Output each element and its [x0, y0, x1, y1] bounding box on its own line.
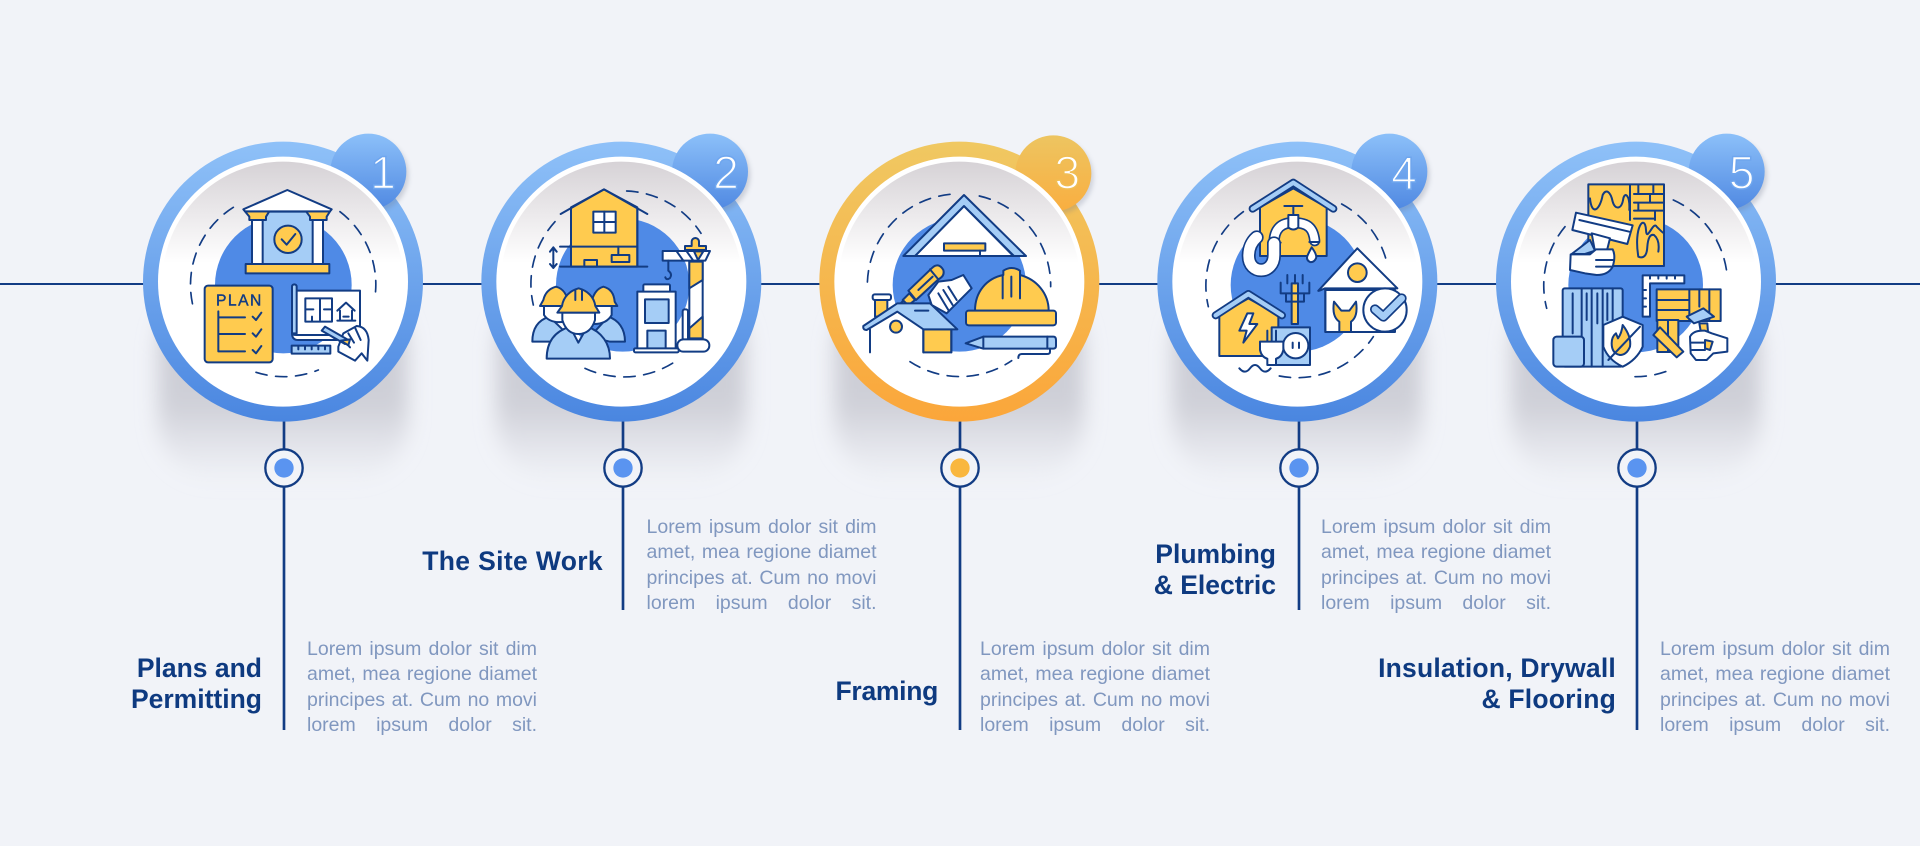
icon: ruler square: [1643, 275, 1684, 317]
heading: the site work: The Site Work: [422, 546, 603, 576]
circle and icon group 2: [481, 134, 762, 610]
icon: insulation panels: [1553, 288, 1643, 367]
text block 5: principes at. Cum no movi: [1660, 689, 1890, 711]
icon: small house: [863, 294, 957, 352]
panel: step 4 plumbing and electric: [1154, 134, 1551, 614]
icon: roof frame: [903, 195, 1026, 256]
icon: flooring planks and hammer: [1653, 289, 1727, 360]
circle and icon group 4: [1157, 134, 1438, 610]
text block 1: principes at. Cum no movi: [307, 689, 537, 711]
text block 5: amet, mea regione diamet: [1660, 663, 1890, 685]
text block 1: [307, 638, 537, 736]
icon: blueprint and hand: [292, 284, 369, 361]
icon: plumbing house: [1249, 183, 1333, 270]
icon: pencil: [966, 337, 1056, 358]
text block 4: principes at. Cum no movi: [1321, 567, 1551, 589]
text block 3: principes at. Cum no movi: [980, 689, 1210, 711]
icon: plan checklist: PLAN: [216, 292, 261, 309]
text block 3: lorem ipsum dolor sit.: [980, 714, 1210, 736]
icon: electric house: [1216, 294, 1310, 372]
circle and icon group 5: [1496, 134, 1776, 730]
icon: plastered brick wall: [1588, 184, 1664, 266]
icon: hand with hammer: [900, 265, 972, 313]
circle and icon group 4: 4: [1391, 147, 1417, 199]
heading: framing: Framing: [836, 676, 938, 706]
icon: raised house: [550, 189, 647, 268]
circle and icon group 3: 3: [1055, 146, 1080, 198]
text block 3: [980, 638, 1210, 736]
panel: step 3 framing: [819, 135, 1210, 736]
text block 2: principes at. Cum no movi: [646, 567, 876, 589]
text block 5: [1660, 638, 1890, 736]
panel: step 2 the site work: [422, 134, 876, 614]
icon: plan checklist: [205, 286, 273, 362]
circle and icon group 1: 1: [370, 146, 396, 198]
icon: utility pole: [1281, 275, 1309, 324]
text block 5: lorem ipsum dolor sit.: [1660, 714, 1890, 736]
icon: hand with trowel: [1570, 213, 1633, 275]
heading: insulation drywall flooring: & Flooring: [1482, 684, 1616, 714]
circle and icon group 3: [819, 135, 1100, 730]
text block 1: lorem ipsum dolor sit.: [307, 714, 537, 736]
heading: plumbing and electric: & Electric: [1154, 570, 1276, 600]
text block 3: Lorem ipsum dolor sit dim: [980, 638, 1210, 660]
timeline horizontal line: [0, 283, 1920, 285]
panel: step 1 plans and permitting: [131, 134, 537, 736]
text block 1: amet, mea regione diamet: [307, 663, 537, 685]
text block 2: lorem ipsum dolor sit.: [646, 592, 876, 614]
circle and icon group 1: [143, 134, 423, 730]
text block 3: amet, mea regione diamet: [980, 663, 1210, 685]
heading: plans and permitting: Plans and: [137, 652, 262, 682]
text block 2: Lorem ipsum dolor sit dim: [646, 516, 876, 538]
icon: bank building: [243, 190, 332, 273]
text block 4: [1321, 516, 1551, 614]
icon: hard hat: [966, 268, 1056, 325]
text block 4: Lorem ipsum dolor sit dim: [1321, 516, 1551, 538]
heading: insulation drywall flooring: [1378, 652, 1616, 714]
icon: workers: [532, 287, 625, 359]
circle and icon group 2: 2: [713, 146, 739, 198]
heading: plumbing and electric: [1154, 538, 1276, 600]
text block 4: amet, mea regione diamet: [1321, 541, 1551, 563]
panel: step 5 insulation drywall flooring: [1378, 134, 1890, 736]
text block 4: lorem ipsum dolor sit.: [1321, 592, 1551, 614]
text block 1: Lorem ipsum dolor sit dim: [307, 638, 537, 660]
text block 5: Lorem ipsum dolor sit dim: [1660, 638, 1890, 660]
icon: building and crane: [634, 238, 710, 352]
heading: plans and permitting: [131, 652, 262, 714]
text block 2: [646, 516, 876, 614]
text block 2: amet, mea regione diamet: [646, 541, 876, 563]
heading: plans and permitting: Permitting: [131, 684, 262, 714]
circle and icon group 5: 5: [1729, 146, 1754, 198]
heading: plumbing and electric: Plumbing: [1155, 538, 1276, 568]
heading: insulation drywall flooring: Insulation, Drywall: [1378, 652, 1616, 682]
icon: repair house: [1318, 248, 1407, 332]
